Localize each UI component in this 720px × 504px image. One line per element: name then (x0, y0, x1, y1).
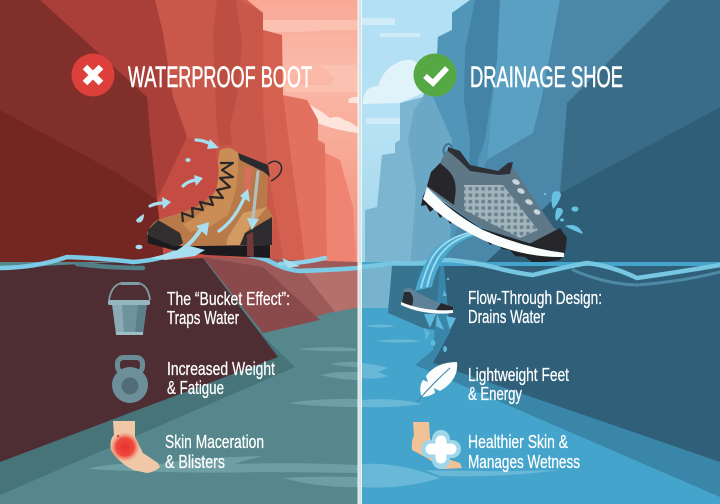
water droplets (544, 191, 583, 234)
label: flow-through design: Flow-Through Design: (468, 288, 602, 308)
label: increased weight: & Fatigue (167, 378, 224, 398)
heading: drainage shoe: DRAINAGE SHOE (470, 61, 623, 94)
right water surface wave (360, 260, 720, 285)
icon: small drainage shoe with drips (401, 278, 456, 352)
label: healthier skin: Healthier Skin & (468, 432, 568, 452)
icon: red cross badge (72, 54, 114, 96)
water arrows (150, 140, 258, 255)
shoe cleats (421, 190, 564, 262)
icon: kettlebell (112, 358, 148, 403)
label: skin maceration: Skin Maceration (165, 432, 264, 452)
lower ground (0, 262, 360, 504)
icon: green check badge (414, 54, 456, 96)
label: bucket effect: The “Bucket Effect”: (167, 289, 290, 309)
panel: waterproof boot canyon scene (0, 0, 360, 504)
label: lightweight feet (468, 365, 569, 404)
icon: blistered foot (110, 421, 160, 473)
shoe laces (511, 178, 541, 216)
lower ground (360, 262, 720, 504)
icon: healthy foot with plus (412, 422, 462, 469)
label: bucket effect: Traps Water (167, 308, 239, 328)
left water surface wave (0, 247, 358, 271)
illustration: waterfall draining from shoe (415, 232, 474, 291)
label: bucket effect (167, 289, 290, 328)
heading: waterproof boot: WATERPROOF BOOT (128, 61, 312, 94)
icon: feather (417, 362, 457, 402)
panel: drainage shoe canyon scene (360, 0, 720, 504)
label: increased weight: Increased Weight (167, 359, 275, 379)
label: healthier skin (468, 432, 580, 472)
centre divider (358, 0, 362, 504)
label: skin maceration (165, 432, 264, 472)
label: healthier skin: Manages Wetness (468, 452, 580, 472)
label: lightweight feet: & Energy (468, 384, 522, 404)
icon: bucket (108, 282, 150, 335)
label: increased weight (167, 359, 275, 398)
river foam streaks (87, 347, 358, 487)
label: flow-through design (468, 288, 602, 327)
label: lightweight feet: Lightweight Feet (468, 365, 569, 385)
label: flow-through design: Drains Water (468, 307, 545, 327)
boot laces (182, 163, 233, 222)
river foam streaks (361, 324, 560, 488)
illustration: drainage shoe (421, 144, 583, 262)
illustration: waterproof boot with water arrows (136, 139, 300, 268)
label: skin maceration: & Blisters (165, 452, 225, 472)
